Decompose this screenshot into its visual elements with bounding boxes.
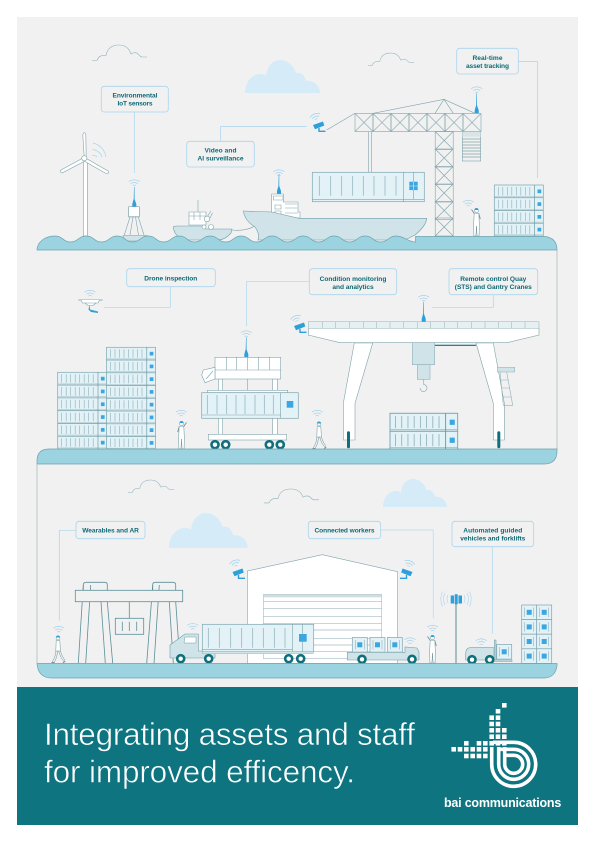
cell tower (441, 592, 471, 664)
camera: warehouse right (400, 568, 412, 578)
label: automated guided vehicles (452, 521, 534, 634)
outline cloud (264, 489, 319, 503)
label: wearables and AR (59, 521, 145, 621)
outline cloud (92, 45, 147, 60)
left container stacks (58, 347, 156, 449)
label: automated guided vehicles: Automated guided (463, 528, 522, 534)
worker: wearables and AR (52, 626, 65, 663)
headline (44, 716, 415, 790)
footer banner (17, 687, 578, 825)
panel: quay scene (top) (37, 45, 557, 250)
straddle carrier (202, 331, 298, 450)
forklift AGV (466, 639, 512, 664)
label: condition monitoring: Condition monitoring (320, 276, 386, 283)
label: connected workers (308, 521, 433, 618)
worker: asset tracking (463, 200, 480, 236)
headline: for improved efficency. (44, 754, 355, 790)
label: video and AI surveillance (187, 126, 307, 167)
worker: connected (427, 625, 438, 663)
blue cloud (245, 60, 320, 93)
container ship (243, 170, 427, 240)
page panel background (17, 17, 578, 687)
label: real-time asset tracking: asset tracking (466, 63, 509, 70)
label: automated guided vehicles: vehicles and forklifts (460, 536, 526, 542)
panel: yard scene (middle) (37, 269, 557, 464)
buoy sensor (123, 180, 147, 241)
quay crane (309, 87, 482, 236)
label: wearables and AR: Wearables and AR (82, 528, 139, 534)
outline cloud (128, 480, 174, 492)
label: connected workers: Connected workers (314, 528, 375, 534)
water and quay strip (37, 236, 557, 250)
label: condition monitoring: and analytics (332, 284, 374, 291)
right border line (556, 250, 558, 449)
warehouse (229, 555, 416, 664)
stairs (497, 367, 515, 405)
label: remote control cranes: Remote control Quay (460, 276, 527, 283)
small container stack (522, 605, 552, 663)
warehouse ground strip (37, 664, 557, 678)
logo: bai communications: bai communications (444, 796, 561, 810)
label: environmental IoT sensors: IoT sensors (118, 101, 153, 108)
yard gantry (75, 582, 183, 663)
camera: crane (313, 122, 326, 131)
label: video and AI surveillance: Video and (204, 148, 236, 155)
label: condition monitoring (247, 269, 397, 326)
tugboat (173, 200, 260, 240)
antenna: crane (471, 87, 482, 113)
blue cloud (383, 479, 447, 507)
antenna: gantry (418, 295, 429, 322)
blue cloud (169, 513, 248, 548)
container stack (494, 185, 543, 236)
panel: warehouse scene (bottom) (37, 479, 557, 678)
label: remote control cranes: (STS) and Gantry Cranes (455, 284, 532, 291)
wind turbine (60, 132, 109, 236)
hanging container (312, 132, 424, 202)
label: environmental IoT sensors (101, 86, 168, 173)
worker: wearable (176, 410, 187, 449)
label: environmental IoT sensors: Environmental (112, 93, 158, 100)
headline: Integrating assets and staff (44, 716, 415, 752)
logo: bai communications (444, 703, 561, 810)
label: real-time asset tracking (457, 48, 538, 178)
left border line (36, 464, 38, 663)
label: drone inspection (104, 269, 215, 307)
label: remote control cranes (432, 269, 538, 307)
camera: gantry (294, 322, 306, 332)
label: real-time asset tracking: Real-time (472, 55, 503, 62)
drone (78, 290, 103, 313)
yard ground strip (37, 449, 557, 464)
flatbed truck (347, 638, 419, 664)
worker: walking (312, 410, 326, 449)
container truck (170, 624, 314, 664)
gantry crane (290, 295, 539, 448)
ground containers (390, 413, 458, 449)
outline cloud (368, 53, 414, 65)
label: drone inspection: Drone inspection (144, 276, 197, 282)
camera: warehouse left (232, 568, 245, 578)
label: video and AI surveillance: AI surveillance (198, 156, 244, 163)
